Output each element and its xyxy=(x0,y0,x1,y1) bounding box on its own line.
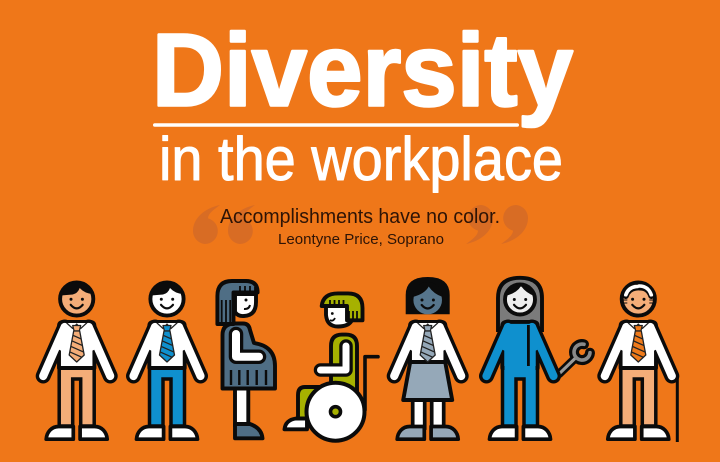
collar xyxy=(157,323,177,328)
shirt and arms xyxy=(134,322,200,376)
shirt and arms xyxy=(394,322,461,376)
overall top and arms xyxy=(486,322,554,376)
trousers xyxy=(621,367,656,426)
icon: closing quotation mark xyxy=(466,205,528,244)
trousers xyxy=(59,367,94,426)
shoes xyxy=(490,426,550,439)
collar xyxy=(418,323,438,328)
dress xyxy=(222,324,275,388)
shoes xyxy=(136,426,198,439)
hair xyxy=(217,281,258,324)
quote attribution: Leontyne Price, Soprano xyxy=(278,232,444,248)
collar xyxy=(628,323,648,328)
thigh xyxy=(298,387,325,420)
head xyxy=(622,282,655,316)
skirt xyxy=(403,362,452,400)
icon: wrench xyxy=(559,344,590,374)
person 1: man with peach trousers xyxy=(43,282,110,439)
legs xyxy=(413,398,444,428)
face xyxy=(235,294,256,316)
head xyxy=(60,282,93,316)
person 5: woman with grey skirt xyxy=(394,277,461,439)
arm xyxy=(236,334,259,357)
shoes xyxy=(608,426,669,439)
shoes xyxy=(46,426,107,439)
head xyxy=(150,282,184,316)
long hair xyxy=(498,278,542,330)
arm xyxy=(320,346,346,370)
trousers xyxy=(150,367,184,426)
tie xyxy=(629,326,647,362)
shirt and arms xyxy=(605,322,672,376)
torso xyxy=(331,335,357,397)
overall legs xyxy=(502,367,538,426)
wheel xyxy=(306,383,364,441)
overall waist xyxy=(504,362,536,374)
tie xyxy=(419,326,437,362)
face xyxy=(326,306,352,326)
wheelchair handle xyxy=(365,357,378,410)
person 7: older man with cane xyxy=(605,282,679,442)
leg xyxy=(235,388,248,425)
shirt and arms xyxy=(43,322,110,376)
person 4: woman in wheelchair xyxy=(284,293,378,441)
quote text: Accomplishments have no color. xyxy=(220,206,500,228)
icon: opening quotation mark xyxy=(193,205,255,244)
person 6: mechanic in blue overalls xyxy=(486,278,554,439)
tie xyxy=(158,326,176,362)
shoe xyxy=(284,418,307,429)
title underline xyxy=(153,123,519,127)
hair xyxy=(322,293,362,320)
tie xyxy=(68,326,86,362)
shoes xyxy=(397,426,458,439)
head xyxy=(406,277,450,314)
title: Diversity xyxy=(152,12,573,128)
zip xyxy=(527,325,530,366)
head xyxy=(505,284,535,314)
person 3: pregnant woman in profile xyxy=(217,281,275,438)
subtitle: in the workplace xyxy=(159,125,563,193)
shoe xyxy=(235,424,262,438)
cane xyxy=(676,377,679,442)
person 2: man with blue trousers xyxy=(134,282,200,439)
collar xyxy=(67,323,87,328)
